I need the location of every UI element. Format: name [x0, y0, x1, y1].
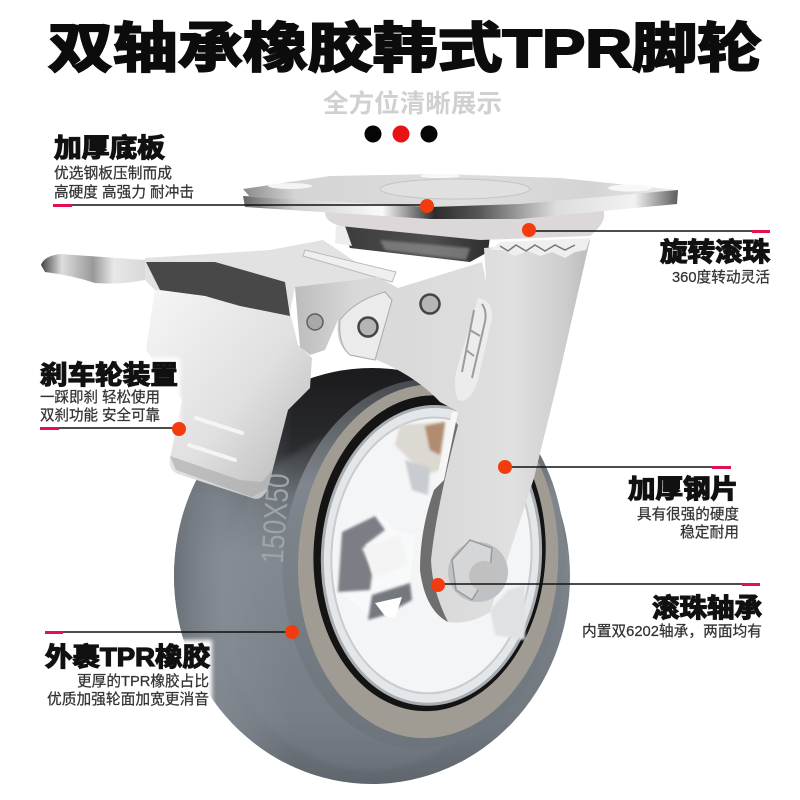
- wheel side rings: [274, 372, 574, 756]
- axle bolt: [448, 540, 508, 602]
- top mounting plate: [243, 174, 678, 219]
- callout: thick steel: 具有很强的硬度: [637, 506, 739, 523]
- callout: ball bearing: 内置双6202轴承，两面均有: [582, 623, 762, 640]
- callout: thick base plate: 加厚底板: [54, 133, 165, 163]
- callout: swivel ball: 旋转滚珠: [660, 237, 770, 267]
- callout: thick steel: 加厚钢片: [628, 474, 738, 504]
- callout: brake device: [38, 358, 186, 436]
- callout: thick base plate: 优选钢板压制而成: [54, 164, 172, 182]
- tire: [174, 368, 570, 784]
- callout: brake device: 一踩即刹 轻松使用: [40, 389, 160, 406]
- carousel dots: [364, 126, 438, 142]
- pedal grooves: [189, 418, 242, 460]
- side link plate: [295, 262, 490, 415]
- callout: brake device: 刹车轮装置: [40, 360, 178, 390]
- callout: ball bearing: 滚珠轴承: [652, 593, 762, 623]
- brake handle: [41, 240, 396, 316]
- callout: thick steel: [498, 460, 739, 541]
- callout: thick base plate: [53, 133, 434, 213]
- callout: swivel ball: [522, 223, 770, 286]
- callout: TPR rubber: 外裹TPR橡胶: [45, 642, 210, 672]
- callout: thick base plate: 高硬度 高强力 耐冲击: [54, 184, 194, 201]
- callout: TPR rubber: [44, 625, 299, 708]
- swivel housing: [325, 205, 604, 262]
- callout: thick steel: 稳定耐用: [680, 524, 739, 541]
- hub stamped reflections: [338, 422, 525, 640]
- callout: TPR rubber: 更厚的TPR橡胶占比: [77, 673, 209, 690]
- brake pedal body: [146, 288, 312, 499]
- callout: TPR rubber: 优质加强轮面加宽更消音: [47, 691, 209, 708]
- fork leg: [420, 240, 590, 623]
- illustration: swivel caster wheel: [41, 174, 678, 784]
- callout: swivel ball: 360度转动灵活: [672, 269, 770, 286]
- callout: brake device: 双刹功能 安全可靠: [40, 406, 160, 424]
- subtitle: 全方位清晰展示: [323, 89, 502, 118]
- weld seams: [455, 238, 590, 401]
- tire size marking: 150X50: [254, 472, 296, 564]
- callout: ball bearing: [431, 578, 762, 640]
- title: 双轴承橡胶韩式TPR脚轮: [48, 19, 762, 79]
